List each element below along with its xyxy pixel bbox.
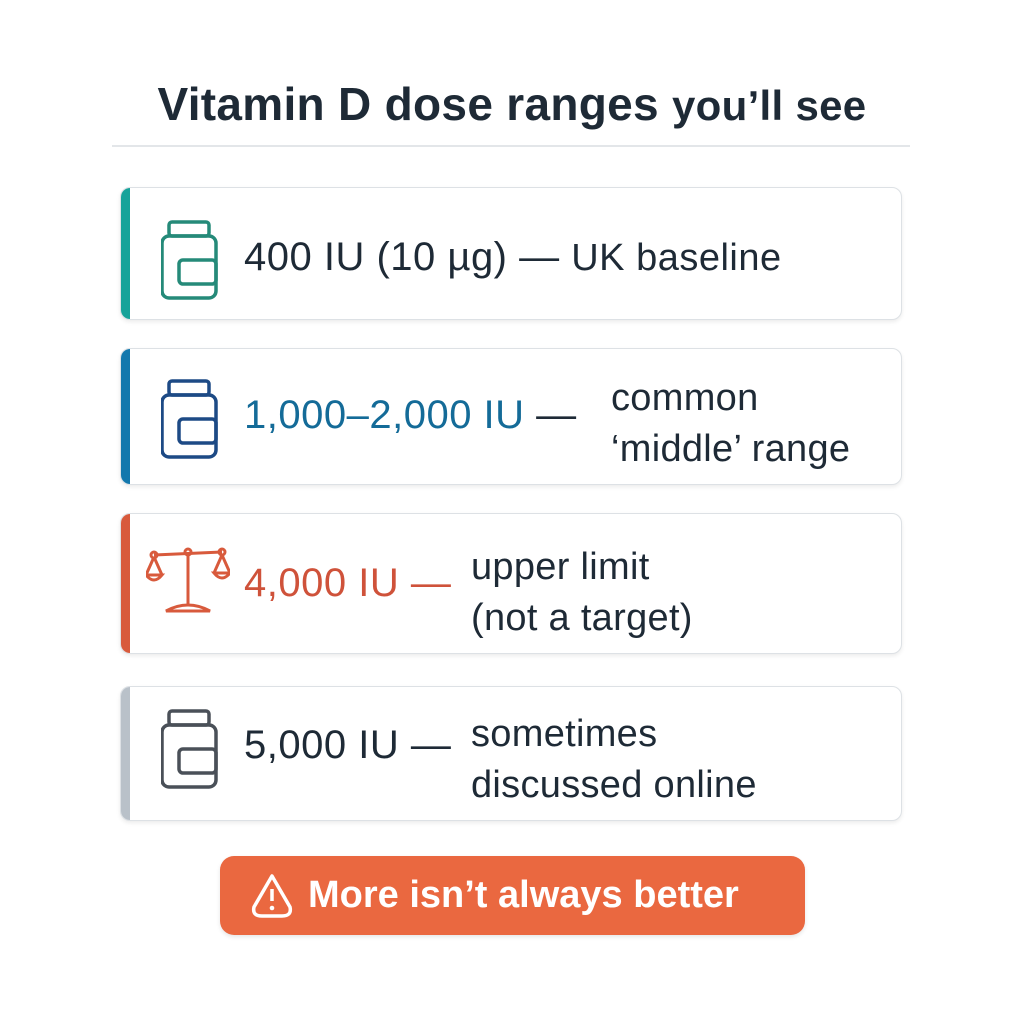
icon: bottle blue [161,379,218,459]
card: 5000: sometimes [471,713,657,755]
callout button: More isn’t always better [308,874,739,916]
card: 4000 [120,513,902,654]
card: 5000 [120,686,902,821]
card: 400 IU [120,187,902,320]
callout button [220,856,805,935]
icon: warning [252,874,292,918]
card: 5000: discussed online [471,764,757,806]
text: 1,000–2,000 IU — [244,393,577,437]
card: 4000: (not a target) [471,597,693,639]
icon: scale [146,548,230,612]
card: 1000-2000 [120,348,902,485]
text: 5,000 IU — [244,723,451,767]
icon: bottle teal [161,220,218,300]
icon: bottle grey [161,709,218,789]
text: 400 IU (10 µg) — UK baseline [244,235,782,279]
title: Vitamin D dose ranges you’ll see [158,78,866,130]
card: 1000-2000: ‘middle’ range [611,428,850,470]
card: 4000: upper limit [471,546,650,588]
card: 1000-2000: common [611,377,759,419]
text: 4,000 IU — [244,561,451,605]
